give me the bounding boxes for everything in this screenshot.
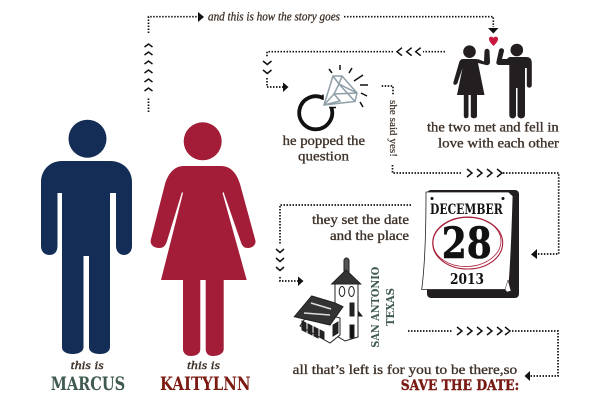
name: Kaitylnn: KAITYLNN xyxy=(160,373,250,395)
label: San Antonio Texas: TEXAS xyxy=(383,288,397,326)
icon: church xyxy=(294,258,362,343)
arrow: to the couple xyxy=(344,17,498,34)
figure: Kaitylnn xyxy=(151,122,256,356)
label: San Antonio Texas xyxy=(368,267,397,348)
text: the two met: the two met and fell in xyxy=(427,121,559,136)
text: he popped the question: he popped the xyxy=(283,134,365,149)
heading: save the date: SAVE THE DATE: xyxy=(401,378,519,394)
text: all that's left: all that’s left is for you to be there,so xyxy=(293,363,517,378)
arrow: to the ring xyxy=(263,48,445,92)
caption: this is Kaitylnn: this is xyxy=(187,358,220,372)
arrow: to save the date xyxy=(408,327,558,381)
icon: calendar: 2013 xyxy=(450,270,484,288)
icon: heart xyxy=(489,37,498,46)
name: Marcus: MARCUS xyxy=(51,373,125,395)
label: she said yes: she said yes! xyxy=(387,100,399,157)
label: San Antonio Texas: SAN ANTONIO xyxy=(368,267,382,348)
figure: Marcus xyxy=(41,120,132,354)
text: the two met: love with each other xyxy=(438,137,559,152)
caption: this is Marcus: this is xyxy=(71,358,104,372)
icon: calendar: 28 xyxy=(442,219,492,269)
text: they set the date: they set the date xyxy=(312,213,409,228)
icon: calendar xyxy=(422,190,519,298)
icon: couple waving xyxy=(453,44,532,118)
arrow: up to the story heading xyxy=(144,12,204,112)
arrow: she said yes path xyxy=(382,86,559,259)
arrow: to the church xyxy=(276,205,411,286)
icon: diamond ring xyxy=(299,65,368,129)
text: they set the date: and the place xyxy=(330,229,409,244)
text: he popped the question: question xyxy=(298,150,349,164)
icon: calendar: DECEMBER xyxy=(430,202,503,218)
heading: and this is how the story goes: and this is how the story goes xyxy=(208,10,340,24)
